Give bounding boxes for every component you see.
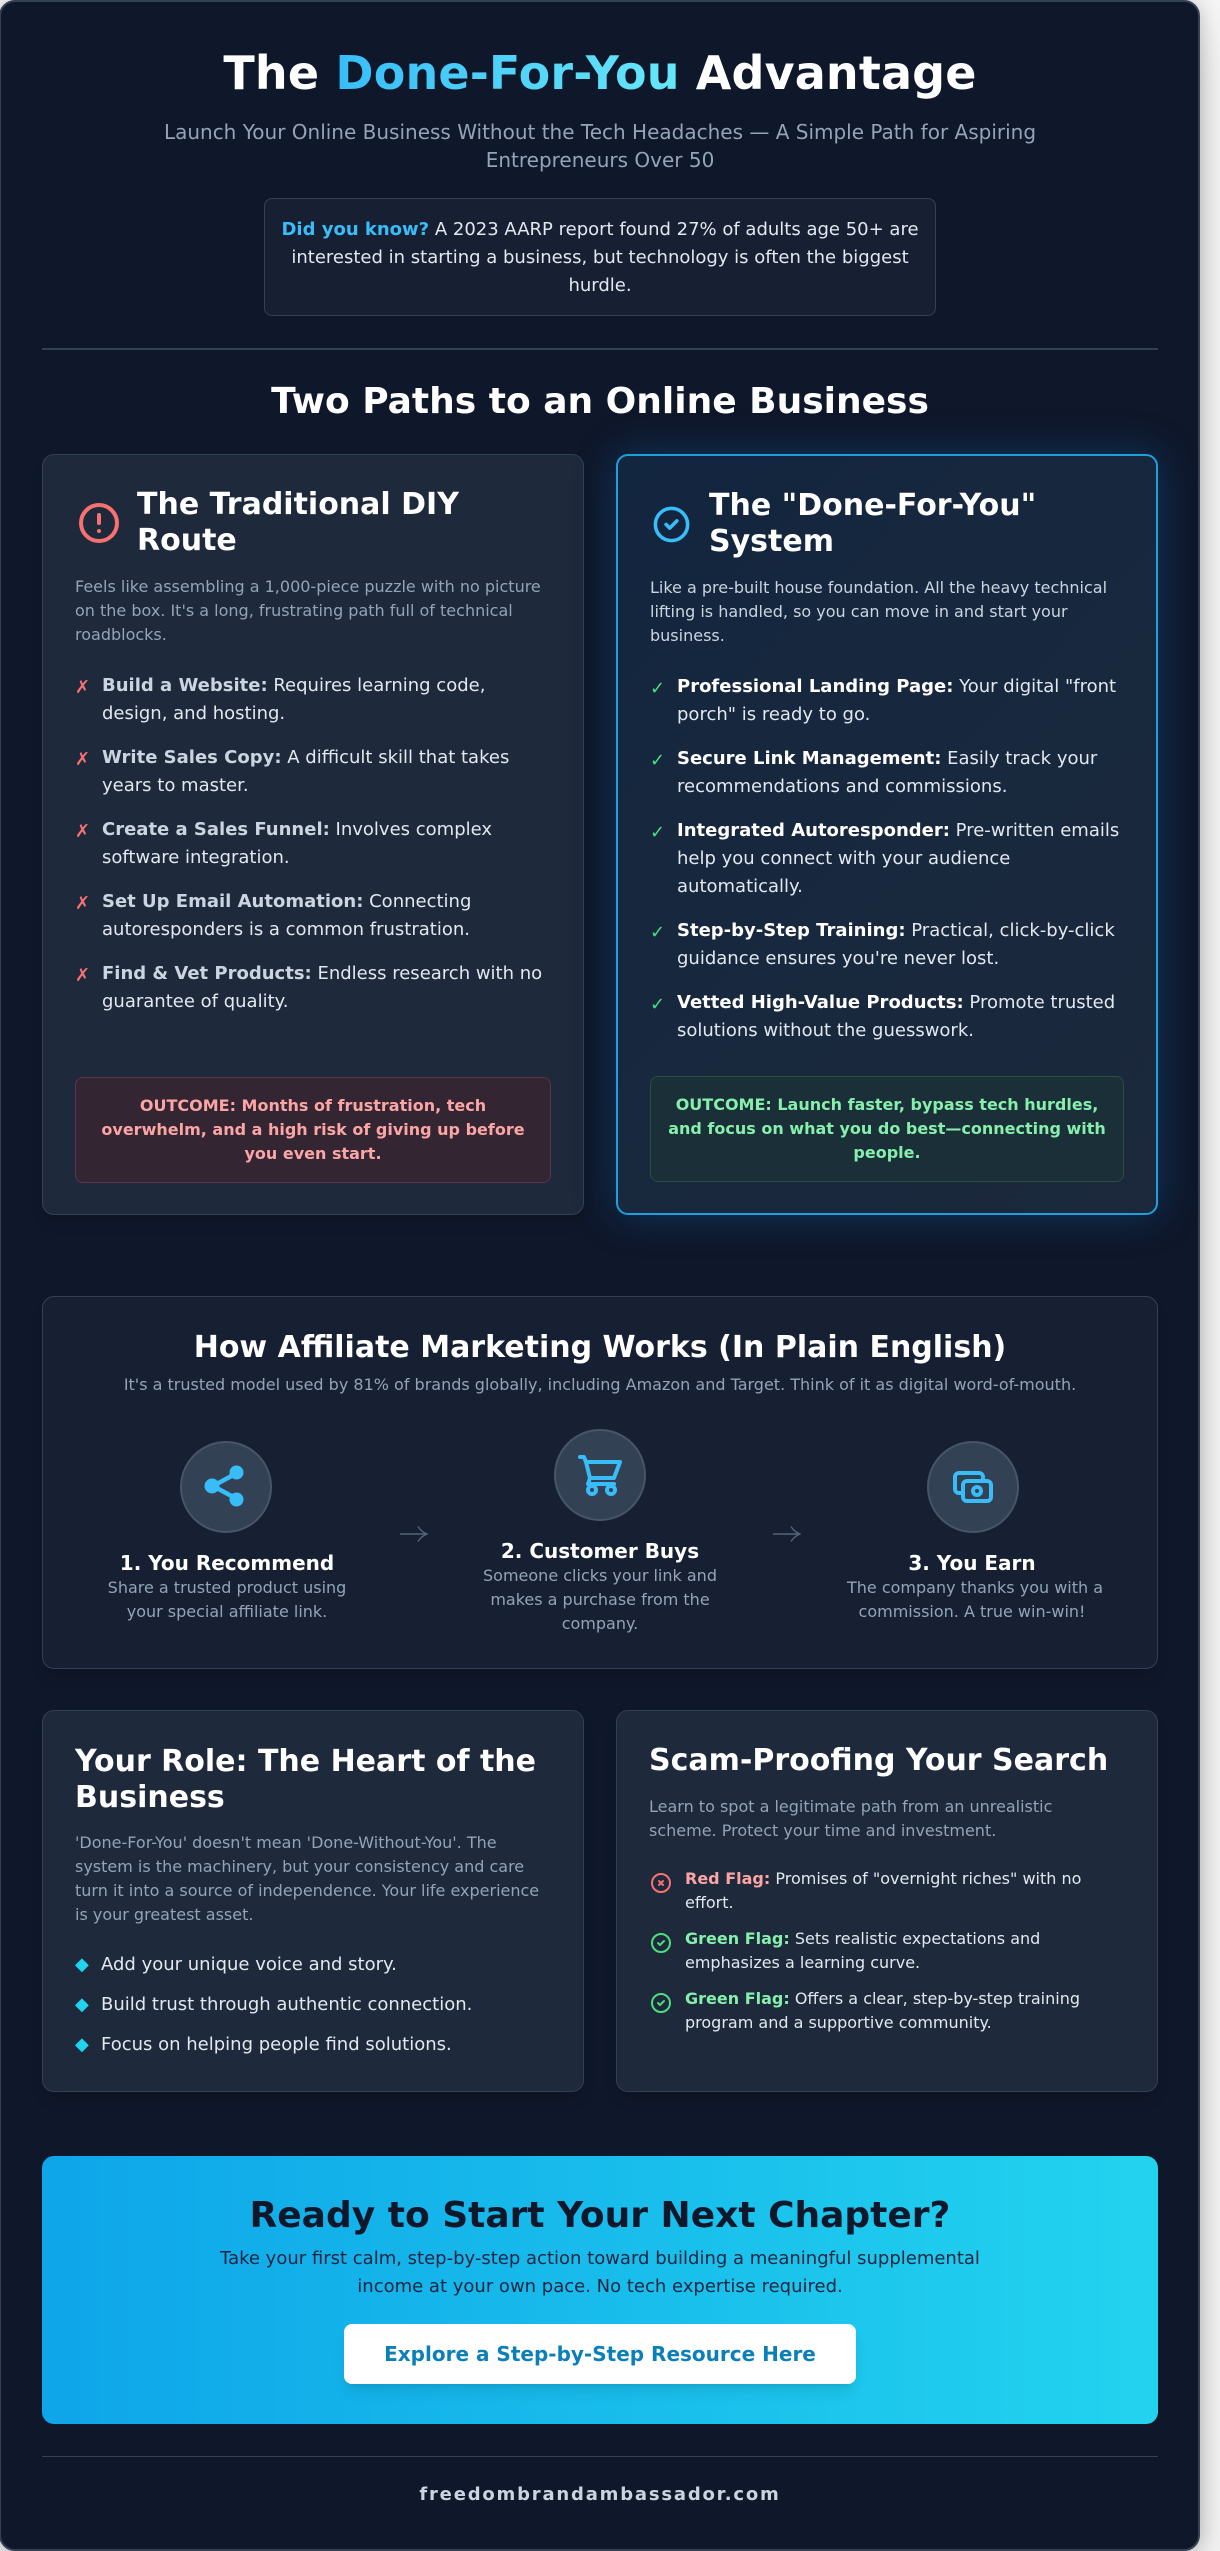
- step 2: [483, 1429, 717, 1633]
- callout: DIY outcome: overwhelm, and a high risk of giving up before: [101, 1120, 525, 1139]
- list: DFY features: Secure Link Management: Easily track your: [677, 748, 1097, 769]
- footer: freedombrandambassador.com: [419, 2484, 781, 2505]
- heading: your role: Your Role: The Heart of the: [75, 1744, 536, 1779]
- heading: scam-proofing: Scam-Proofing Your Search: [649, 1743, 1108, 1778]
- button: Explore a Step-by-Step Resource Here: [384, 2342, 816, 2366]
- heading: CTA: Ready to Start Your Next Chapter?: [250, 2195, 950, 2236]
- heading: how it works: How Affiliate Marketing Works (In Plain English): [194, 1330, 1006, 1365]
- callout: DFY outcome: people.: [853, 1143, 921, 1162]
- list: role points: Add your unique voice and story.: [101, 1954, 397, 1975]
- text: step 1: 1. You Recommend: [120, 1551, 334, 1575]
- text: DFY intro: business.: [650, 626, 725, 645]
- heading: DFY: [709, 488, 1036, 559]
- callout: did you know: [264, 198, 936, 316]
- list: DFY features: guidance ensures you're never lost.: [677, 948, 999, 969]
- text: step 2: 2. Customer Buys: [501, 1539, 699, 1563]
- text: CTA: [220, 2248, 980, 2297]
- callout: DIY outcome: you even start.: [244, 1144, 382, 1163]
- panel: how affiliate marketing works: [42, 1296, 1158, 1669]
- list: DIY tasks: years to master.: [102, 775, 249, 796]
- step 1: Share a trusted product using: [108, 1578, 346, 1597]
- text: DIY intro: roadblocks.: [75, 625, 167, 644]
- step 2: Someone clicks your link and: [483, 1566, 717, 1585]
- list: role points: ◆: [75, 1994, 89, 2015]
- list: DFY features: help you connect with your audience: [677, 848, 1010, 869]
- list: DFY features: porch" is ready to go.: [677, 704, 870, 725]
- subtitle: Launch Your Online Business Without the Tech Headaches — A Simple Path for Aspiring: [164, 120, 1036, 144]
- text: DFY intro: Like a pre-built house foundation. All the heavy technical: [650, 578, 1107, 597]
- list: DFY features: Professional Landing Page: Your digital "front: [677, 676, 1116, 697]
- heading: your role: Business: [75, 1780, 225, 1815]
- text: DIY intro: Feels like assembling a 1,000-piece puzzle with no picture: [75, 577, 541, 596]
- list: DIY tasks: Write Sales Copy: A difficult skill that takes: [102, 747, 509, 768]
- heading: DIY: Route: [137, 523, 237, 558]
- list: DIY tasks: ✗: [75, 749, 90, 770]
- list: DIY tasks: ✗: [75, 821, 90, 842]
- text: scam intro: scheme. Protect your time and investment.: [649, 1821, 996, 1840]
- title: The Done-For-You Advantage: [223, 46, 977, 100]
- list: flags: Red Flag: Promises of "overnight riches" with no: [685, 1869, 1081, 1888]
- text: DFY intro: lifting is handled, so you can move in and start your: [650, 602, 1068, 621]
- list: DIY tasks: Find & Vet Products: Endless research with no: [102, 963, 542, 984]
- heading: two paths: Two Paths to an Online Business: [271, 381, 929, 422]
- step 1: your special affiliate link.: [127, 1602, 327, 1621]
- button: [344, 2324, 856, 2384]
- list: flags: Green Flag: Offers a clear, step-by-step training: [685, 1989, 1080, 2008]
- list: DIY tasks: guarantee of quality.: [102, 991, 288, 1012]
- list: DFY features: Integrated Autoresponder: Pre-written emails: [677, 820, 1119, 841]
- list: DIY tasks: Create a Sales Funnel: Involves complex: [102, 819, 492, 840]
- callout: DIY outcome: OUTCOME: Months of frustration, tech: [140, 1096, 486, 1115]
- subtitle: Entrepreneurs Over 50: [486, 148, 714, 172]
- list: DFY features: ✓: [650, 822, 665, 843]
- step 2: company.: [562, 1614, 638, 1633]
- icon: share: [180, 1441, 272, 1533]
- panel: call to action: [42, 2156, 1158, 2424]
- callout: did you know: interested in starting a business, but technology is often the biggest: [291, 247, 909, 268]
- list: role points: [75, 1954, 472, 2055]
- list: role points: ◆: [75, 2034, 89, 2055]
- text: role intro: 'Done-For-You' doesn't mean 'Done-Without-You'. The: [75, 1833, 497, 1852]
- text: role intro: turn it into a source of independence. Your life experience: [75, 1881, 539, 1900]
- text: CTA: Take your first calm, step-by-step action toward building a meaningful supplemental: [220, 2248, 980, 2269]
- list: DFY features: recommendations and commissions.: [677, 776, 1007, 797]
- list: DFY features: automatically.: [677, 876, 803, 897]
- callout: DFY outcome: and focus on what you do best—connecting with: [668, 1119, 1106, 1138]
- list: DIY tasks: software integration.: [102, 847, 290, 868]
- list: DFY features: Vetted High-Value Products: Promote trusted: [677, 992, 1115, 1013]
- arrow 1: [400, 1526, 428, 1542]
- icon: warning circle: [79, 503, 119, 543]
- callout: did you know: Did you know? A 2023 AARP report found 27% of adults age 50+ are: [281, 219, 919, 240]
- heading: DIY: [137, 487, 460, 558]
- text: DFY intro: [650, 578, 1107, 645]
- list: DFY features: solutions without the guesswork.: [677, 1020, 974, 1041]
- panel: done-for-you system: [616, 454, 1158, 1215]
- callout: DIY outcome: [75, 1077, 551, 1183]
- text: scam intro: Learn to spot a legitimate path from an unrealistic: [649, 1797, 1052, 1816]
- list: DIY tasks: ✗: [75, 677, 90, 698]
- list: DIY tasks: autoresponders is a common frustration.: [102, 919, 470, 940]
- panel: your role: [42, 1710, 584, 2092]
- icon: green flag: [651, 1993, 671, 2013]
- list: DFY features: [650, 676, 1119, 1041]
- icon: check circle: [654, 506, 690, 542]
- list: flags: effort.: [685, 1893, 734, 1912]
- heading: DIY: The Traditional DIY: [137, 487, 459, 522]
- heading: DFY: System: [709, 524, 834, 559]
- step 2: makes a purchase from the: [490, 1590, 710, 1609]
- list: DFY features: ✓: [650, 750, 665, 771]
- step 3: The company thanks you with a: [847, 1578, 1103, 1597]
- icon: money: [927, 1441, 1019, 1533]
- text: how intro: It's a trusted model used by 81% of brands globally, including Amazon and Target. Think of it as digital word-of-mouth.: [124, 1375, 1076, 1394]
- text: DIY intro: [75, 577, 541, 644]
- text: DIY intro: on the box. It's a long, frustrating path full of technical: [75, 601, 513, 620]
- list: DIY tasks: design, and hosting.: [102, 703, 285, 724]
- list: DFY features: ✓: [650, 678, 665, 699]
- icon: red flag: [651, 1873, 671, 1893]
- list: DFY features: Step-by-Step Training: Practical, click-by-click: [677, 920, 1115, 941]
- list: flags: program and a supportive community.: [685, 2013, 992, 2032]
- list: DIY tasks: ✗: [75, 893, 90, 914]
- heading: your role: [74, 1744, 536, 1815]
- list: DFY features: ✓: [650, 994, 665, 1015]
- list: flags: Green Flag: Sets realistic expectations and: [685, 1929, 1040, 1948]
- icon: green flag: [651, 1933, 671, 1953]
- list: DIY tasks: Set Up Email Automation: Connecting: [102, 891, 471, 912]
- list: role points: ◆: [75, 1954, 89, 1975]
- text: scam intro: [649, 1797, 1052, 1840]
- list: DFY features: ✓: [650, 922, 665, 943]
- callout: did you know: hurdle.: [568, 275, 632, 296]
- text: role intro: [75, 1833, 539, 1924]
- list: DIY tasks: [75, 675, 542, 1012]
- text: step 3: 3. You Earn: [908, 1551, 1036, 1575]
- arrow 2: [773, 1526, 801, 1542]
- step 1: [108, 1441, 346, 1621]
- list: DIY tasks: ✗: [75, 965, 90, 986]
- panel: traditional DIY route: [42, 454, 584, 1215]
- list: DIY tasks: Build a Website: Requires learning code,: [102, 675, 485, 696]
- list: flags: emphasizes a learning curve.: [685, 1953, 920, 1972]
- icon: cart: [554, 1429, 646, 1521]
- text: role intro: system is the machinery, but your consistency and care: [75, 1857, 524, 1876]
- panel: scam-proofing: [616, 1710, 1158, 2092]
- subtitle: [164, 120, 1036, 172]
- list: flags: [651, 1869, 1081, 2032]
- text: role intro: is your greatest asset.: [75, 1905, 253, 1924]
- text: CTA: income at your own pace. No tech expertise required.: [357, 2276, 843, 2297]
- step 3: commission. A true win-win!: [859, 1602, 1085, 1621]
- callout: DFY outcome: OUTCOME: Launch faster, bypass tech hurdles,: [676, 1095, 1098, 1114]
- list: role points: Build trust through authentic connection.: [101, 1994, 472, 2015]
- callout: DFY outcome: [650, 1076, 1124, 1182]
- heading: DFY: The "Done-For-You": [709, 488, 1036, 523]
- step 3: [846, 1441, 1103, 1621]
- list: role points: Focus on helping people find solutions.: [101, 2034, 452, 2055]
